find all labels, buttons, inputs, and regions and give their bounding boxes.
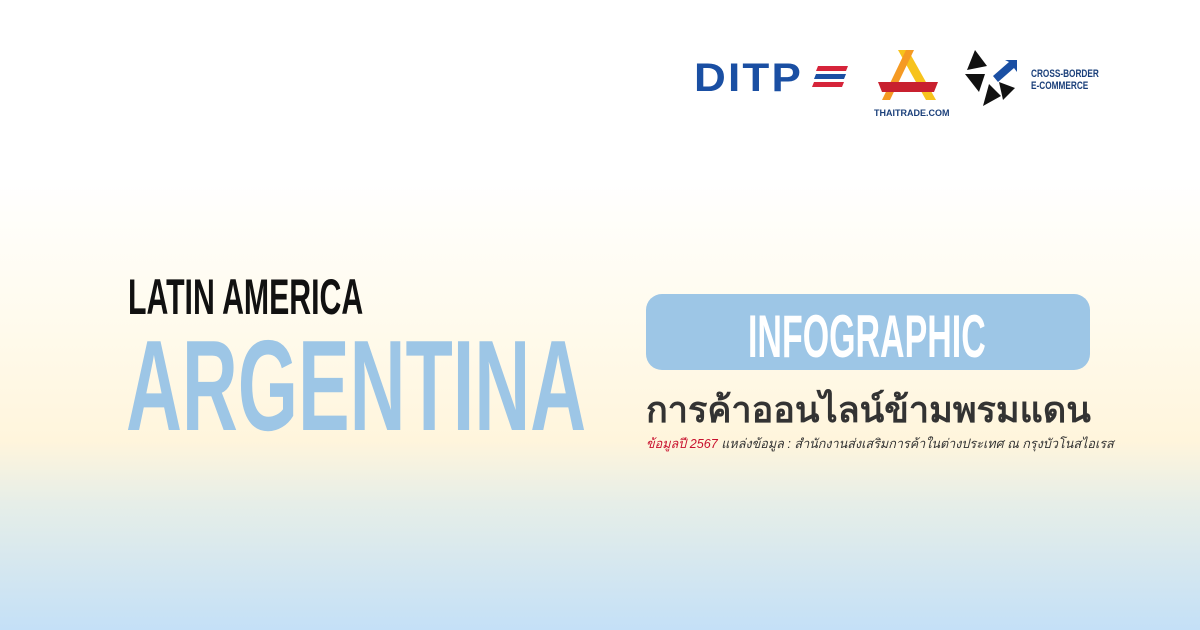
source note: ข้อมูลปี 2567 แหล่งข้อมูล : สำนักงานส่งเสริมการค้าในต่างประเทศ ณ กรุงบัวโนสไอเรส bbox=[646, 436, 1114, 451]
logo: Cross-border e-commerce: CROSS-BORDER bbox=[1031, 68, 1099, 80]
pill: infographic label: INFOGRAPHIC bbox=[748, 303, 986, 370]
logo: DITP: DITP bbox=[694, 56, 803, 100]
logo: ThaiTrade bbox=[874, 50, 950, 118]
logo: Cross-border e-commerce bbox=[965, 50, 1099, 106]
logo: ThaiTrade: THAITRADE.COM bbox=[874, 108, 950, 118]
heading: Thai title: การค้าออนไลน์ข้ามพรมแดน bbox=[646, 389, 1091, 430]
title: Argentina: ARGENTINA bbox=[126, 314, 586, 458]
pill: infographic label bbox=[646, 294, 1090, 370]
logo: Cross-border e-commerce: E-COMMERCE bbox=[1031, 80, 1088, 92]
subtitle: Latin America: LATIN AMERICA bbox=[128, 269, 363, 325]
